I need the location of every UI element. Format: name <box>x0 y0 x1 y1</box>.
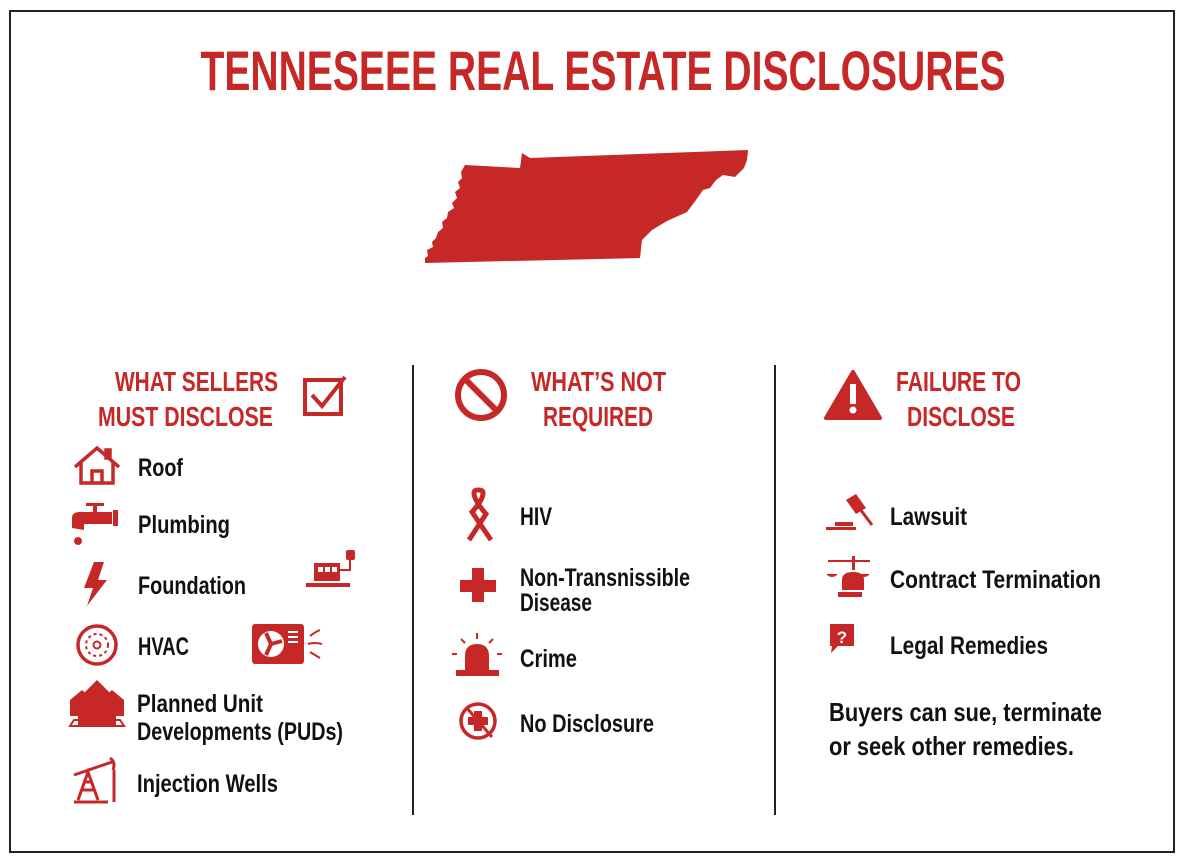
icon: faucet <box>72 503 118 545</box>
panel: what's not required <box>452 366 690 738</box>
text: items: Roof <box>138 454 184 482</box>
text: items: Planned Unit <box>137 690 264 718</box>
icon: air conditioner <box>252 624 322 664</box>
icon: question bubble <box>830 624 854 653</box>
icon: ribbon <box>469 490 491 540</box>
text: items <box>137 454 343 798</box>
icon: prohibited <box>458 372 504 418</box>
panel: failure to disclose <box>826 366 1102 761</box>
icon: small appliance with plug <box>306 550 355 587</box>
text: items: Foundation <box>138 572 246 600</box>
heading: what's not required: WHAT’S NOT <box>531 366 666 397</box>
icon: oil pump <box>74 758 114 802</box>
heading: failure to disclose: DISCLOSE <box>907 401 1015 432</box>
text: items: HVAC <box>138 633 189 661</box>
icon: warning <box>826 372 880 418</box>
text: items <box>520 503 690 738</box>
text: items: Disease <box>520 589 592 617</box>
text: items: HIV <box>520 503 552 531</box>
text: items: Developments (PUDs) <box>137 718 343 746</box>
icon: house <box>75 448 119 483</box>
icon: houses <box>70 680 124 726</box>
icon: lightning <box>84 562 107 606</box>
text: summary <box>829 697 1102 761</box>
text: summary: or seek other remedies. <box>829 731 1074 761</box>
text: items: Injection Wells <box>137 770 278 798</box>
icon: gavel <box>826 494 872 530</box>
heading: what sellers must disclose <box>98 366 278 432</box>
heading: failure to disclose: FAILURE TO <box>896 366 1021 397</box>
text: items: Non-Transnissible <box>520 564 690 592</box>
icon: question bubble: ? <box>837 628 847 647</box>
map: Tennessee <box>425 150 748 263</box>
heading: failure to disclose <box>896 366 1021 432</box>
panel: what sellers must disclose <box>70 366 355 802</box>
icon: siren <box>452 633 502 676</box>
text: items: Legal Remedies <box>890 632 1048 660</box>
icon: cross <box>460 568 496 602</box>
text: items <box>890 503 1101 660</box>
text: items: Contract Termination <box>890 566 1101 594</box>
text: items: No Disclosure <box>520 710 654 738</box>
heading: what's not required: REQUIRED <box>543 401 653 432</box>
icon: checkbox <box>305 377 345 414</box>
text: items: Plumbing <box>138 511 230 539</box>
text: items: Lawsuit <box>890 503 968 531</box>
heading: what's not required <box>531 366 666 432</box>
heading: what sellers must disclose: MUST DISCLOSE <box>98 401 273 432</box>
icon: smoke detector <box>78 626 116 664</box>
icon: no disclosure <box>461 704 495 738</box>
heading: what sellers must disclose: WHAT SELLERS <box>115 366 278 397</box>
text: summary: Buyers can sue, terminate <box>829 697 1102 727</box>
text: items: Crime <box>520 645 577 673</box>
icon: scales <box>826 556 870 597</box>
